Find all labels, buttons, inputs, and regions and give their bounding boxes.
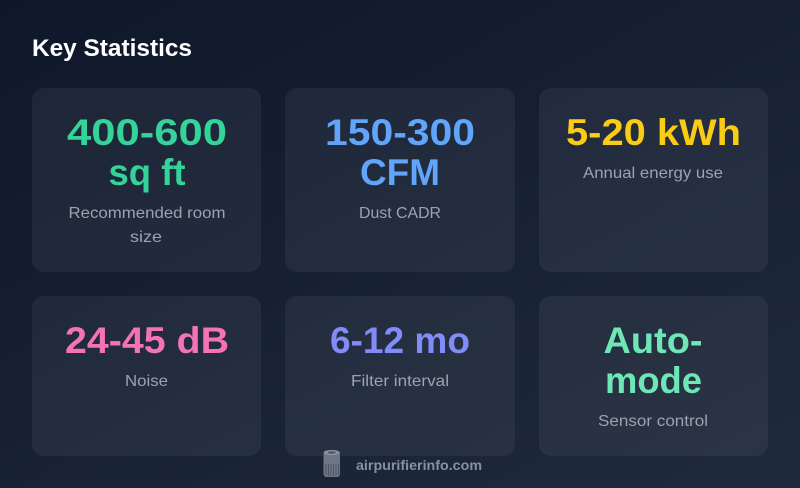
value: 5-20 kWh: 5-20 kWh bbox=[566, 112, 741, 153]
value: 400-600 sq ft: sq ft bbox=[108, 152, 186, 193]
brand name: airpurifierinfo.com bbox=[356, 457, 482, 473]
value: auto-mode bbox=[604, 320, 702, 401]
footer: brand bbox=[324, 450, 482, 477]
label: noise: Noise bbox=[125, 373, 168, 390]
value: 6-12 mo: 6-12 mo bbox=[330, 320, 470, 361]
value: auto-mode: Auto- bbox=[604, 320, 702, 361]
value: auto-mode: mode bbox=[605, 360, 702, 401]
label: recommended room size: size bbox=[130, 229, 162, 246]
value: 24-45 dB: 24-45 dB bbox=[65, 320, 229, 361]
panel: annual energy use bbox=[539, 88, 768, 272]
label: sensor control: Sensor control bbox=[598, 413, 708, 430]
title: Key Statistics bbox=[32, 35, 192, 62]
panel: filter interval bbox=[285, 296, 515, 456]
label: dust CADR: Dust CADR bbox=[359, 205, 441, 222]
label: filter interval: Filter interval bbox=[351, 373, 449, 390]
value: 150-300 CFM: CFM bbox=[360, 152, 440, 193]
value: 400-600 sq ft bbox=[67, 112, 227, 193]
panel: recommended room size bbox=[32, 88, 261, 272]
panel: sensor control bbox=[539, 296, 768, 456]
icon: air purifier bbox=[324, 450, 340, 477]
value: 400-600 sq ft: 400-600 bbox=[67, 112, 227, 153]
panel: dust CADR bbox=[285, 88, 515, 272]
label: recommended room size bbox=[68, 205, 226, 246]
value: 150-300 CFM bbox=[325, 112, 475, 193]
label: recommended room size: Recommended room bbox=[68, 205, 226, 222]
label: annual energy use: Annual energy use bbox=[583, 165, 723, 182]
panel: noise bbox=[32, 296, 261, 456]
value: 150-300 CFM: 150-300 bbox=[325, 112, 475, 153]
